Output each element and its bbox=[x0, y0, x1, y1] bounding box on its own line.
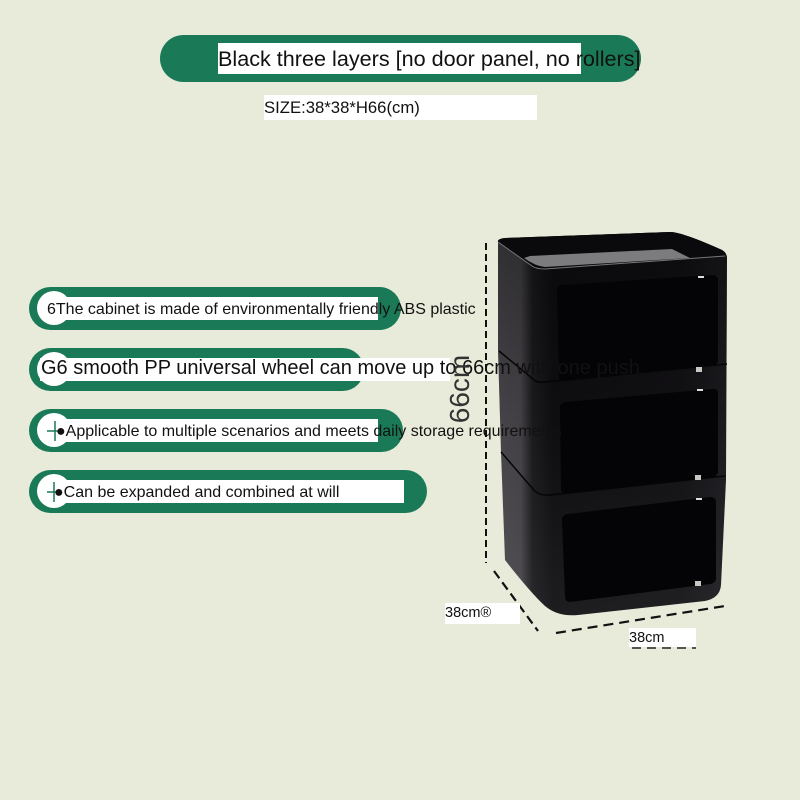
pill 2 circle bbox=[37, 352, 71, 386]
title text: Black three layers [no door panel, no rollers] bbox=[218, 46, 641, 71]
depth label bbox=[445, 603, 520, 624]
title banner bbox=[160, 35, 641, 82]
width label bbox=[629, 628, 696, 647]
pill 4 white strip bbox=[52, 480, 404, 503]
height label: 66cm bbox=[444, 355, 475, 423]
door 1 bbox=[557, 275, 718, 381]
feature text 2: G6 smooth PP universal wheel can move up to 66cm with one push bbox=[41, 357, 640, 379]
door 2 bbox=[560, 389, 718, 494]
height dimension line bbox=[485, 243, 487, 563]
cabinet body bbox=[498, 232, 727, 615]
cabinet top panel bbox=[524, 249, 690, 267]
feature pill 3 background bbox=[29, 409, 403, 452]
depth dimension line bbox=[494, 571, 538, 631]
icon: pill 4 cross mark bbox=[47, 482, 56, 502]
feature pill 1 background bbox=[29, 287, 401, 330]
depth text: 38cm® bbox=[445, 605, 491, 621]
door 3 bbox=[562, 497, 716, 602]
pill 3 white strip bbox=[52, 419, 378, 442]
pill 2 white strip bbox=[40, 358, 450, 381]
width text: 38cm bbox=[629, 630, 664, 646]
size text: SIZE:38*38*H66(cm) bbox=[264, 98, 420, 117]
pill 3 circle bbox=[37, 413, 71, 447]
feature text 4: ●Can be expanded and combined at will bbox=[54, 484, 339, 501]
feature pill 4 background bbox=[29, 470, 427, 513]
icon: pill 3 cross mark bbox=[47, 421, 58, 441]
width dimension line bbox=[556, 606, 725, 633]
feature pill 2 background bbox=[29, 348, 364, 391]
hinge pins bbox=[698, 276, 704, 278]
layer seams bbox=[499, 351, 727, 382]
feature text 3: ●Applicable to multiple scenarios and meets daily storage requirements bbox=[56, 423, 562, 440]
pill 4 circle bbox=[37, 474, 71, 508]
size label bbox=[264, 95, 537, 120]
clipped dashes under width label bbox=[632, 647, 696, 649]
pill 1 white strip bbox=[52, 297, 378, 320]
pill 1 circle bbox=[37, 291, 71, 325]
feature text 1: 6The cabinet is made of environmentally friendly ABS plastic bbox=[47, 301, 476, 318]
title white backing bbox=[218, 43, 581, 74]
